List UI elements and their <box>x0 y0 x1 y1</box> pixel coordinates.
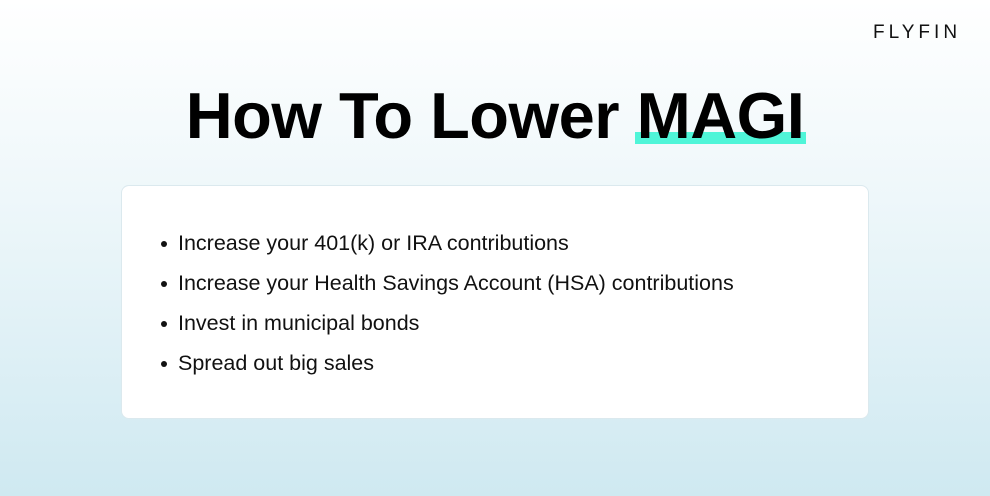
panel: tips list <box>121 185 869 419</box>
panel: tips list: Increase your Health Savings Account (HSA) contributions <box>178 271 734 295</box>
panel: tips list: Increase your 401(k) or IRA contributions <box>178 231 569 255</box>
title: How To Lower <box>186 79 619 152</box>
panel: tips list: Invest in municipal bonds <box>178 311 419 335</box>
title <box>186 79 806 152</box>
title: MAGI <box>637 79 804 152</box>
logo: FLYFIN <box>873 22 961 43</box>
panel: tips list: Spread out big sales <box>178 351 374 375</box>
